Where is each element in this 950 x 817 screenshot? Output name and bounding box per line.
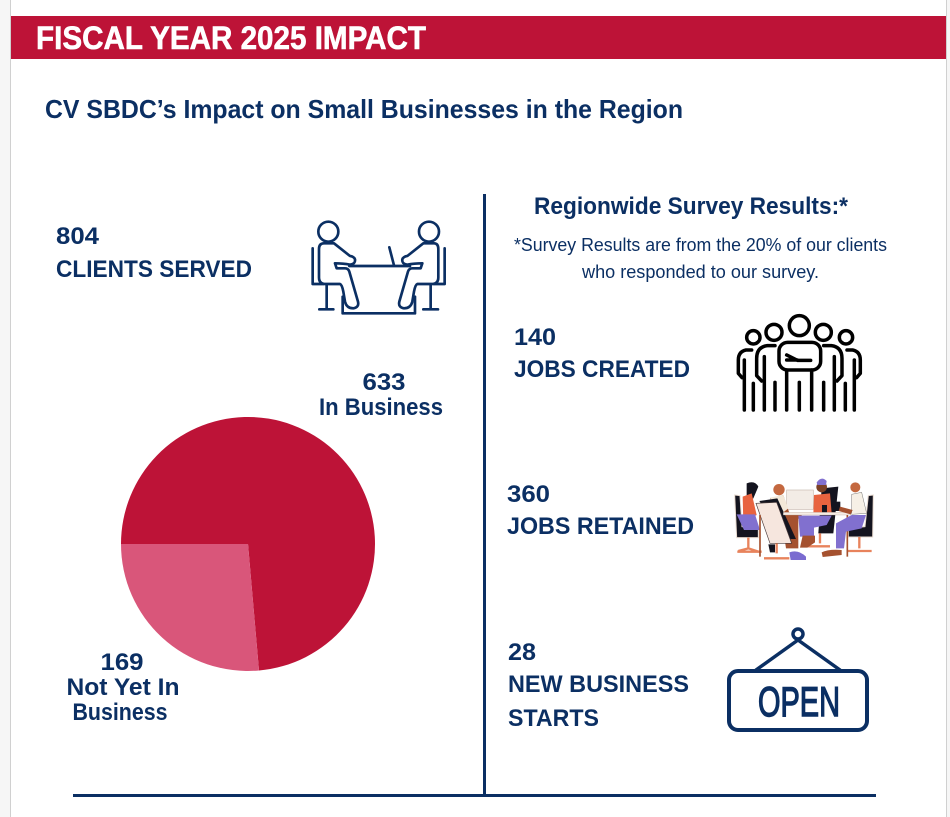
stat: jobs created: 140 [514,324,556,351]
survey note: *Survey Results are from the 20% of our clients [514,235,887,255]
label: in business [319,369,443,421]
icon: team of people [738,316,860,410]
stat: new business starts: NEW BUSINESS [508,671,689,698]
slice: not yet in business [121,544,259,671]
stat: jobs created: JOBS CREATED [514,356,690,383]
stat: new business starts [508,639,689,732]
left chair [735,495,758,538]
bottom rule [73,794,876,797]
label: not yet in business: 169 [100,649,144,676]
person 2 [773,484,785,495]
label: in business: In Business [319,394,443,421]
stat: jobs retained: 360 [507,481,550,508]
icon: two people meeting at a table [313,222,445,313]
title banner [11,16,946,59]
subtitle: CV SBDC’s Impact on Small Businesses in the Region [45,94,683,124]
icon: open sign [729,629,867,730]
label: not yet in business: Not Yet In [66,674,180,701]
stat: new business starts: 28 [508,639,536,666]
table [783,512,851,515]
stat: clients served: 804 [56,223,100,250]
cups [822,505,827,513]
shoe [822,550,842,557]
stat: new business starts: STARTS [508,705,599,732]
stat: jobs retained: JOBS RETAINED [507,513,694,540]
survey heading: Regionwide Survey Results:* [534,193,849,220]
stat: jobs retained [507,481,694,540]
stat: clients served [56,223,252,283]
pie chart [121,417,375,671]
front chair [756,502,792,543]
stat: jobs created [514,324,690,383]
front chair back [759,498,796,539]
label: in business: 633 [362,369,406,396]
stat: clients served: CLIENTS SERVED [56,256,252,283]
vertical divider [483,194,486,797]
person 4 [850,482,860,492]
person 1 [747,482,758,502]
shoe [789,551,806,560]
back chair [818,487,838,533]
title: FISCAL YEAR 2025 IMPACT [36,20,426,56]
person 3 [816,482,827,492]
label: not yet in business [66,649,180,726]
right chair [848,495,873,537]
survey note [514,235,887,282]
survey note: who responded to our survey. [581,262,819,282]
slice: in business [121,417,375,670]
monitor [787,490,813,509]
open sign text: OPEN [758,678,840,725]
illustration: team around a table [735,479,873,560]
label: not yet in business: Business [72,699,168,726]
